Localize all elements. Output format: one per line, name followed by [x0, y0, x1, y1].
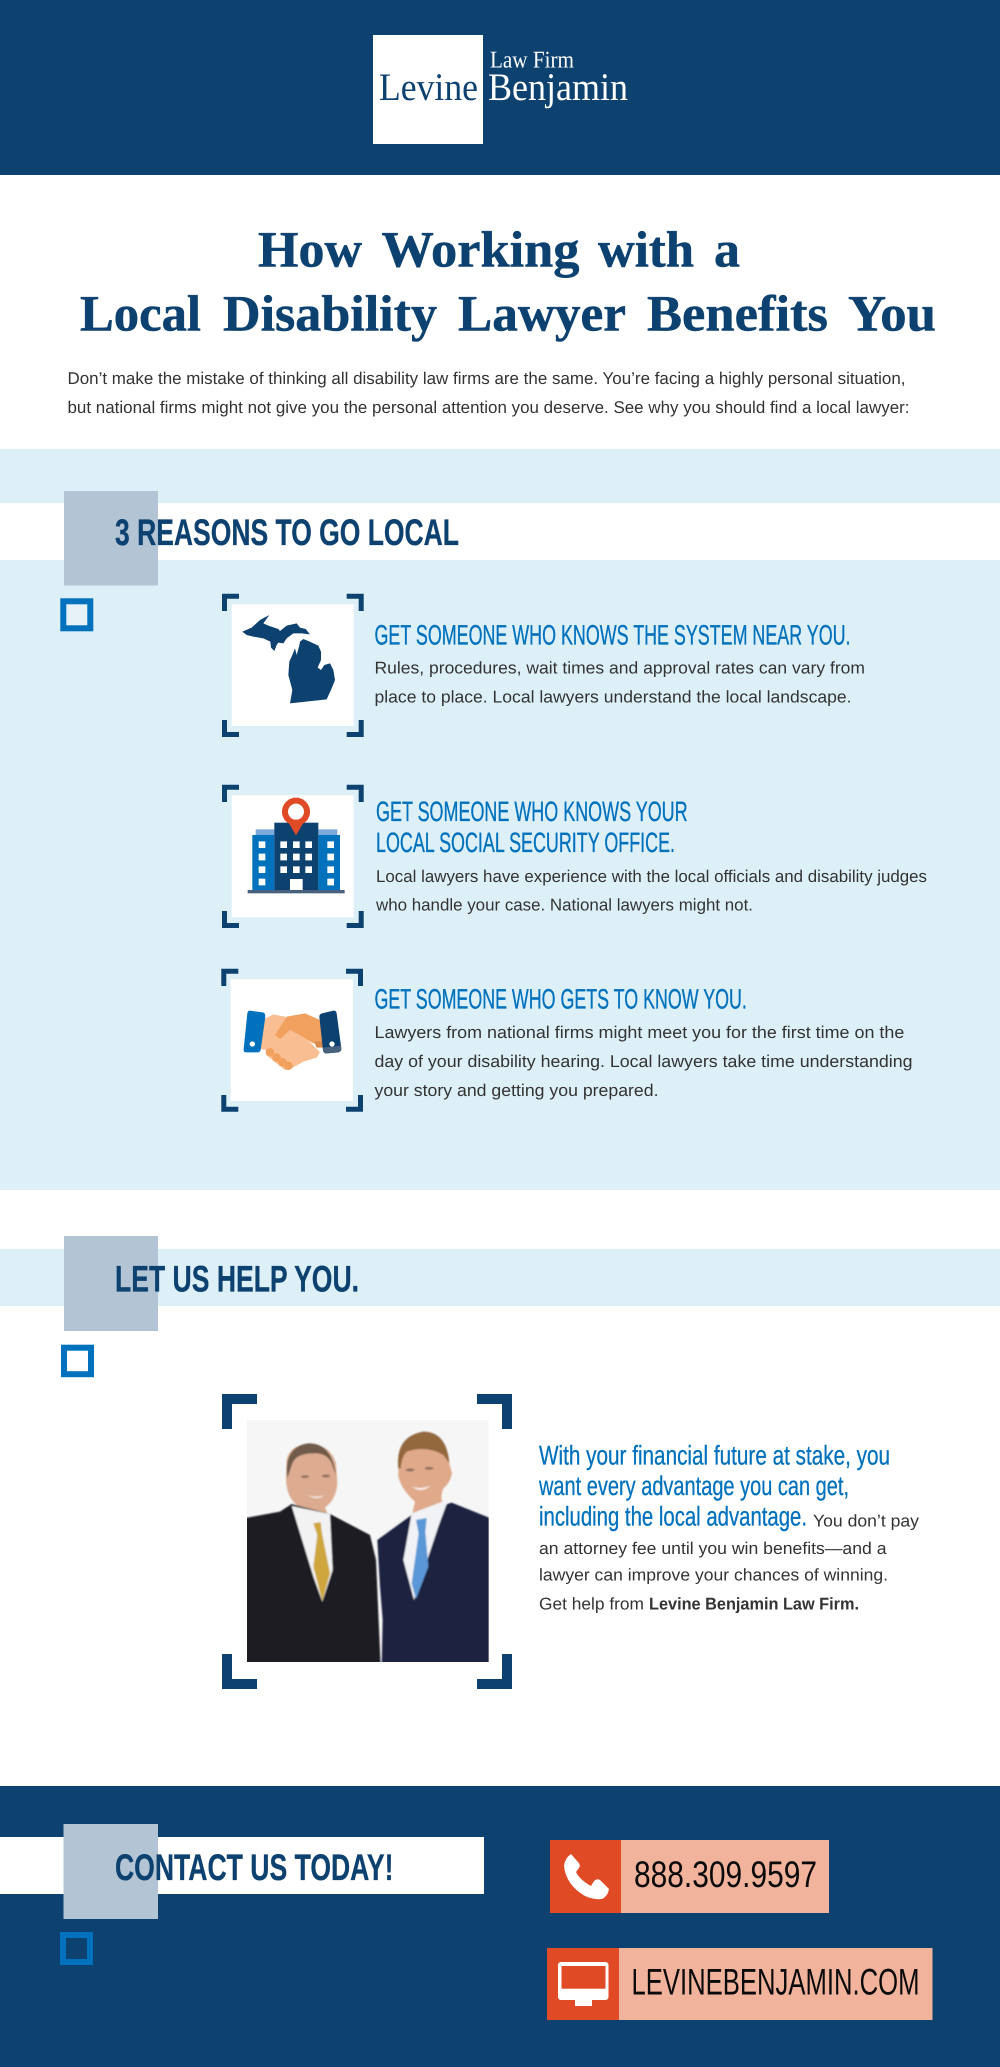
title: a: [714, 223, 740, 279]
call to help text: want every advantage you can get,: [538, 1471, 849, 1501]
reason 2 text: [375, 867, 927, 914]
title: Local: [80, 287, 201, 343]
call to help text: With your financial future at stake, you: [539, 1440, 890, 1470]
call to help text: Get help from: [539, 1594, 644, 1613]
title: Lawyer: [458, 287, 626, 343]
reason 3 text: Lawyers from national firms might meet you for the first time on the: [374, 1023, 904, 1042]
icon: office building with pin: [222, 785, 364, 928]
panel: let us help you: [0, 1236, 1000, 1689]
call to help text: lawyer can improve your chances of winning.: [539, 1566, 888, 1585]
small blue square: [63, 1935, 90, 1962]
section heading: LET US HELP YOU.: [115, 1259, 359, 1300]
logo: Benjamin: [488, 66, 628, 109]
phone number: 888.309.9597: [634, 1854, 817, 1895]
small blue square: [64, 1348, 91, 1374]
title: How: [258, 223, 362, 279]
icon: phone: [564, 1854, 609, 1899]
intro text: but national firms might not give you the personal attention you deserve. See why you should find a local lawyer:: [68, 398, 910, 417]
reason 2 heading: GET SOMEONE WHO KNOWS YOUR: [376, 796, 688, 827]
logo: Law Firm: [490, 48, 574, 74]
call to help text: You don’t pay: [813, 1512, 920, 1531]
contact heading: CONTACT US TODAY!: [115, 1847, 394, 1888]
icon: Michigan map: [222, 594, 364, 737]
title: [80, 223, 936, 343]
call to help text: [538, 1440, 920, 1613]
website button: [547, 1948, 932, 2020]
small blue square: [63, 601, 90, 628]
title: Working: [382, 223, 580, 279]
call to help text: including the local advantage.: [539, 1502, 807, 1532]
reason 3 heading: GET SOMEONE WHO GETS TO KNOW YOU.: [374, 984, 747, 1015]
call to help text: an attorney fee until you win benefits—and a: [539, 1539, 887, 1558]
intro text: [68, 369, 910, 417]
reason 1: [222, 594, 865, 737]
logo: Levine: [379, 66, 478, 109]
panel: contact footer: [0, 1786, 1000, 2067]
title: You: [848, 287, 936, 343]
phone button: [550, 1840, 829, 1913]
reason 3 text: your story and getting you prepared.: [374, 1081, 658, 1100]
reason 2 heading: [376, 796, 688, 858]
reason 2 heading: LOCAL SOCIAL SECURITY OFFICE.: [376, 827, 675, 858]
reason 2 text: who handle your case. National lawyers might not.: [375, 895, 753, 914]
reason 3 text: [374, 1023, 912, 1100]
accent square: [64, 1236, 158, 1331]
reason 2: [222, 785, 927, 928]
intro text: Don’t make the mistake of thinking all disability law firms are the same. You’re facing a highly personal situation,: [68, 369, 906, 388]
panel: 3 reasons to go local: [0, 449, 1000, 1190]
reason 3: [221, 969, 913, 1112]
reason 1 text: Rules, procedures, wait times and approval rates can vary from: [374, 658, 865, 678]
title: Disability: [223, 287, 437, 343]
icon: handshake: [221, 969, 363, 1112]
photo of two lawyers: [222, 1394, 512, 1689]
section heading: 3 REASONS TO GO LOCAL: [115, 512, 459, 553]
icon: computer monitor: [558, 1962, 608, 2006]
reason 2 text: Local lawyers have experience with the local officials and disability judges: [376, 867, 927, 886]
title: Benefits: [647, 287, 828, 343]
header banner with logo: [0, 0, 1000, 175]
title: with: [598, 223, 694, 279]
reason 1 text: place to place. Local lawyers understand the local landscape.: [374, 688, 852, 706]
reason 1 text: [374, 658, 865, 706]
accent square: [64, 491, 158, 586]
accent square: [64, 1824, 158, 1919]
reason 3 text: day of your disability hearing. Local lawyers take time understanding: [374, 1052, 912, 1071]
call to help text: Levine Benjamin Law Firm.: [649, 1594, 859, 1613]
logo: [373, 35, 628, 144]
